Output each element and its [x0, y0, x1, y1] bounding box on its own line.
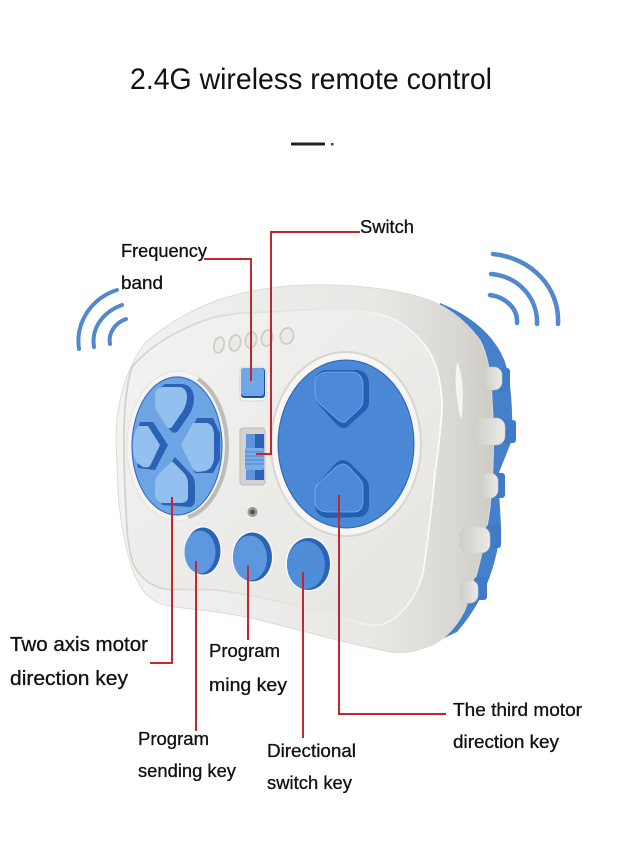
title divider — [291, 142, 334, 146]
key: third motor backward — [315, 460, 369, 518]
label: programming key: Program — [209, 641, 280, 661]
label: directional switch key — [267, 741, 356, 793]
blue rear edge — [440, 303, 512, 640]
key: bottom — [155, 457, 195, 507]
faceplate — [124, 310, 442, 625]
label: program sending key: sending key — [138, 761, 236, 781]
frequency band button — [240, 367, 266, 401]
title: 2.4G wireless remote control — [130, 63, 492, 96]
left direction pad — [127, 371, 229, 521]
leader lines — [150, 232, 446, 738]
icon: wireless signal left — [78, 290, 126, 349]
label: program sending key — [138, 729, 236, 781]
remote control — [116, 285, 516, 653]
label: directional switch key: switch key — [267, 773, 352, 793]
icon: wireless signal right — [490, 254, 558, 324]
label: frequency band — [121, 241, 207, 293]
label: two axis motor direction key — [10, 634, 148, 690]
key: right — [182, 418, 220, 473]
label: directional switch key: Directional — [267, 741, 356, 761]
shell — [116, 285, 493, 653]
programming button — [232, 531, 274, 583]
label: two axis motor direction key: Two axis motor — [10, 634, 148, 656]
right direction pad — [271, 352, 421, 536]
status LED — [248, 507, 258, 517]
label: programming key: ming key — [209, 675, 287, 695]
label: frequency band: Frequency — [121, 241, 207, 261]
power switch — [240, 428, 265, 485]
directional switch button — [286, 536, 332, 592]
label: third motor direction key: direction key — [453, 732, 559, 752]
key: third motor forward — [315, 370, 369, 428]
label: two axis motor direction key: direction key — [10, 668, 128, 690]
rim highlight — [456, 362, 463, 420]
label: program sending key: Program — [138, 729, 209, 749]
key: top — [155, 384, 194, 433]
label: frequency band: band — [121, 273, 163, 293]
label: programming key — [209, 641, 287, 695]
label: third motor direction key — [453, 700, 582, 752]
label: third motor direction key: The third motor — [453, 700, 582, 720]
program sending button — [184, 526, 222, 576]
key: left — [133, 422, 168, 470]
side buttons — [460, 367, 516, 603]
label: switch: Switch — [360, 217, 414, 237]
indicator lights — [212, 327, 295, 354]
